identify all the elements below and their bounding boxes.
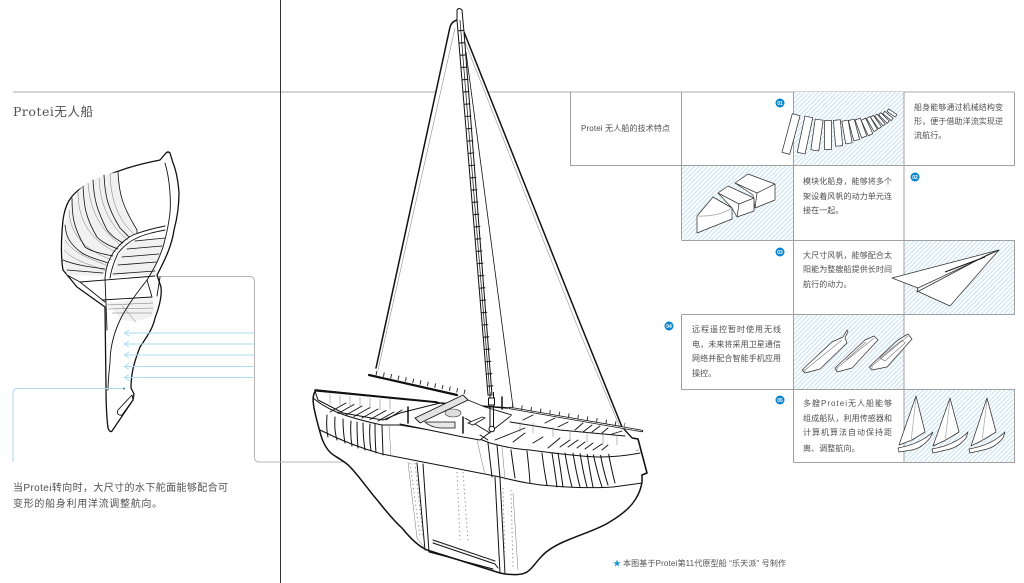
callout line: rudder	[13, 388, 125, 462]
icon: fleet of three boats	[898, 396, 1005, 453]
feature 01 text	[914, 102, 1003, 140]
feature 02 text: 接在一起。	[803, 205, 844, 215]
feature 04 text: 电，未来将采用卫星通信	[692, 339, 781, 349]
rudder fin	[118, 395, 133, 415]
feature 01 text: 流航行。	[914, 130, 946, 140]
hull ribs	[327, 415, 615, 487]
icon: badge 02: 02	[912, 175, 918, 181]
feature 05 text: 离、调整航向。	[803, 443, 860, 453]
icon: badge 05: 05	[777, 398, 783, 404]
feature 04 text: 网络并配合智能手机应用	[692, 353, 781, 363]
icon: badge 03	[776, 248, 784, 256]
feature 01 text: 形，便于借助洋流实现逆	[914, 116, 1003, 126]
icon: remote control boards	[802, 330, 912, 373]
feature 05 text	[803, 398, 892, 453]
sails	[376, 20, 622, 432]
illustration: rudder and deformable hull	[62, 152, 179, 432]
icon: badge 05	[776, 396, 784, 404]
feature 02 text: 模块化船身，能够将多个	[803, 176, 892, 186]
feature 05 text: 组成船队，利用传感器和	[803, 413, 892, 423]
mast base	[490, 392, 494, 428]
icon: large solar sail	[892, 250, 999, 306]
feature 05 text: 多艘Protei无人船能够	[803, 398, 892, 408]
caption: 变形的船身利用洋流调整航向。	[13, 497, 163, 510]
shaded hull ribs	[63, 172, 165, 321]
keel panel lines	[408, 462, 518, 574]
feature 03 text: 大尺寸风帆，能够配合太	[803, 250, 892, 260]
icon: badge 02	[910, 172, 920, 182]
feature 04 text: 操控。	[692, 368, 716, 378]
icon: badge 04	[664, 322, 674, 330]
icon: badge 04: 04	[666, 324, 672, 330]
caption: 当Protei转向时，大尺寸的水下舵面能够配合可	[13, 481, 228, 494]
waterline and gunwale	[320, 430, 642, 488]
footnote: ★	[613, 559, 621, 568]
main boom	[369, 373, 470, 395]
illustration: Protei sailboat	[313, 8, 647, 575]
panel: technical feature grid	[570, 92, 1014, 462]
feature 03 text	[803, 250, 892, 289]
icon: badge 01	[776, 98, 784, 108]
icon: badge 01: 01	[777, 101, 783, 107]
feature 03 text: 航行的动力。	[803, 279, 852, 289]
icon: badge 03: 03	[777, 250, 783, 256]
feature 02 text: 架设着风帆的动力单元连	[803, 191, 892, 201]
icon: modular hull blocks	[697, 174, 775, 233]
icon: articulated hull segments	[782, 109, 897, 154]
center deck	[400, 392, 512, 440]
flow arrows	[124, 330, 254, 380]
caption	[13, 481, 228, 510]
mast with ladder rungs	[457, 8, 492, 395]
callout line: water flow to hull	[157, 276, 345, 462]
feature 03 text: 阳能为整艘船提供长时间	[803, 264, 892, 274]
stern rail	[510, 406, 642, 431]
hatched cells	[681, 92, 1014, 462]
feature 05 text: 计算机算法自动保持距	[803, 427, 892, 437]
feature 02 text	[803, 176, 892, 215]
feature 01 text: 船身能够通过机械结构变	[914, 102, 1003, 112]
arched frame	[105, 226, 165, 278]
lower frame and rudder line	[67, 163, 170, 390]
hull	[313, 390, 647, 575]
title: Protei无人船	[13, 104, 93, 119]
bow deck	[315, 390, 440, 421]
feature 04 text: 远程遥控暂时使用无线	[692, 324, 781, 334]
grid heading: Protei 无人船的技术特点	[581, 123, 670, 133]
feature 04 text	[692, 324, 781, 378]
stern deck	[488, 408, 647, 475]
footnote: 本图基于Protei第11代原型船 “乐天派” 号制作	[623, 558, 786, 568]
